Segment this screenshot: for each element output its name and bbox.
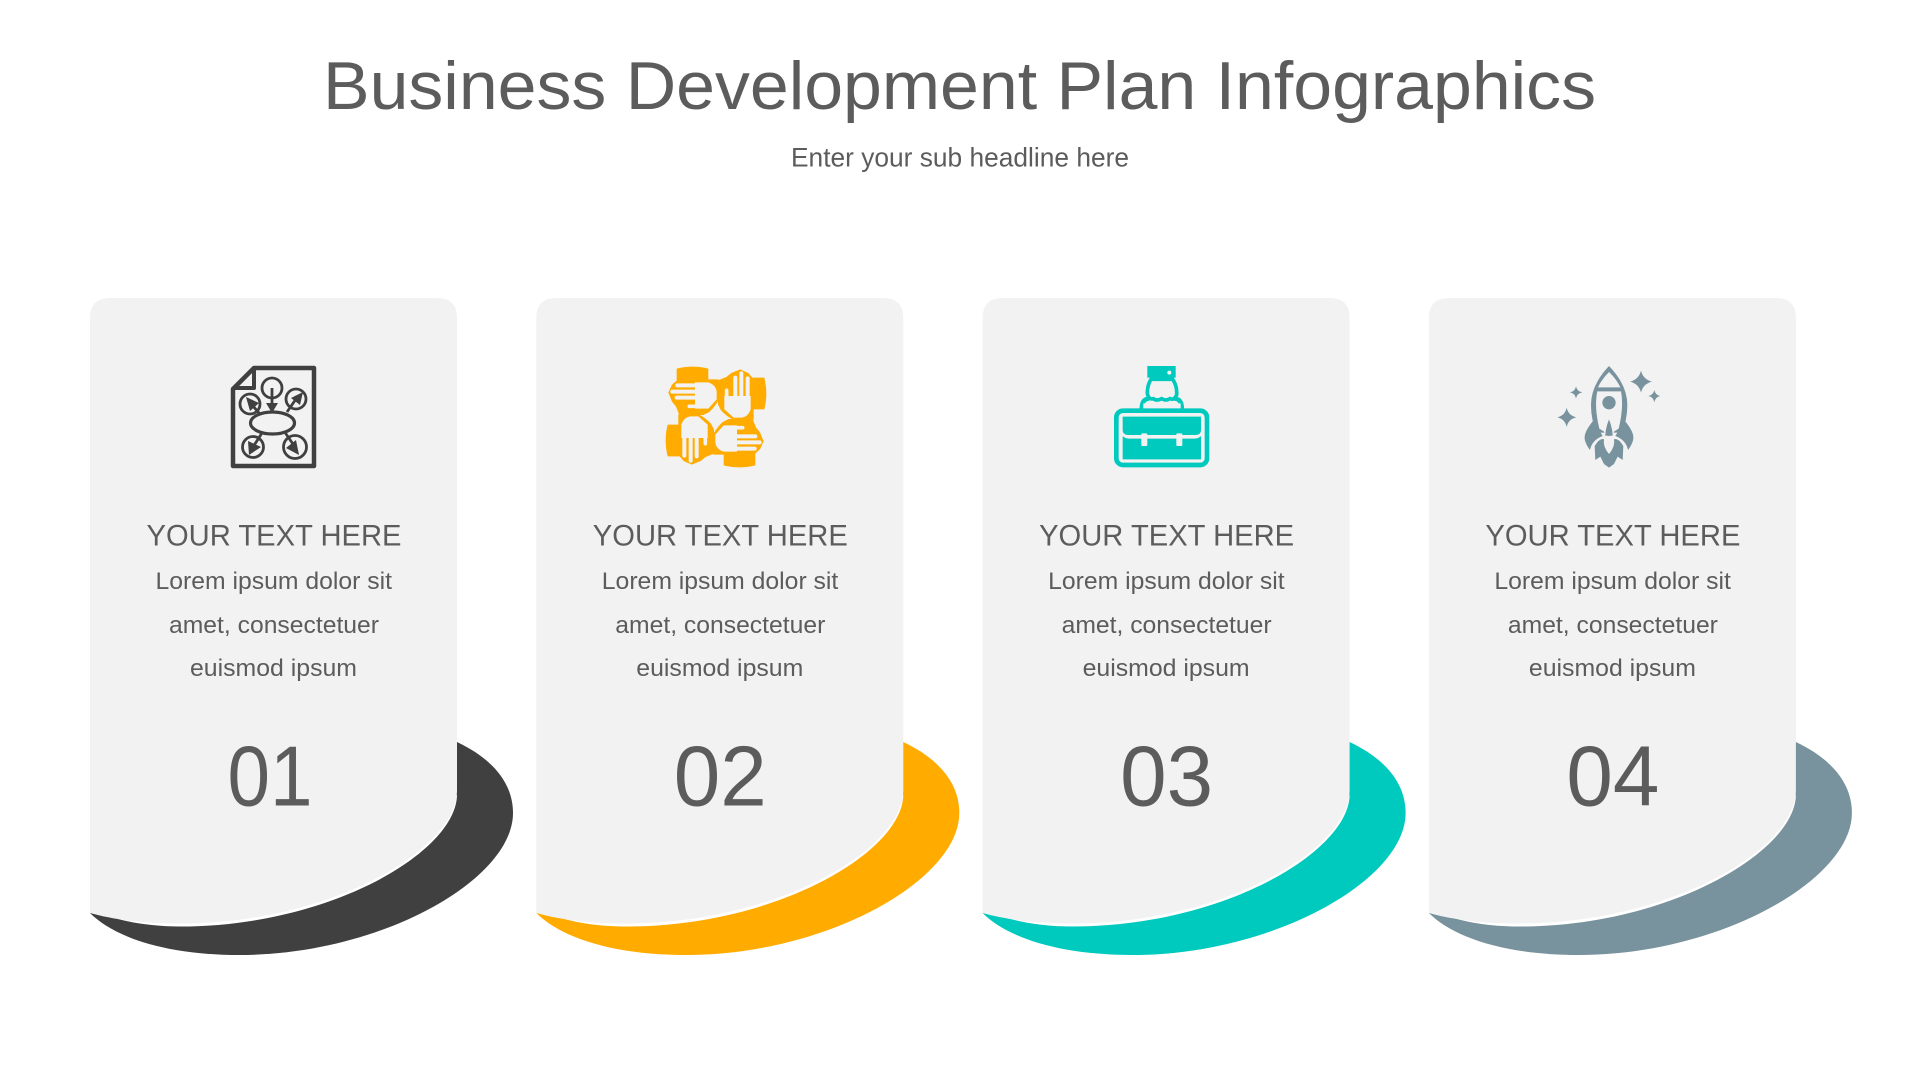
body text 02: euismod ipsum <box>636 655 803 682</box>
body text 04: Lorem ipsum dolor sit <box>1494 568 1731 595</box>
panel: card 03 <box>983 298 1406 955</box>
panel: card 04 <box>1429 298 1852 955</box>
icon: rocket with stars <box>1557 366 1660 468</box>
card edge highlight 02 <box>551 795 903 926</box>
number 03: 03 <box>1120 730 1213 824</box>
card body 02 <box>536 298 903 924</box>
icon: document with mind map <box>233 368 314 466</box>
card body 04 <box>1429 298 1796 924</box>
body text 01: euismod ipsum <box>190 655 357 682</box>
card body 01 <box>90 298 457 924</box>
body text 01: amet, consectetuer <box>169 612 379 639</box>
body text 03: amet, consectetuer <box>1062 612 1272 639</box>
body text 03: Lorem ipsum dolor sit <box>1048 568 1285 595</box>
body text 01 <box>156 568 392 682</box>
icon: hand holding briefcase <box>1116 366 1207 465</box>
icon: four hands <box>666 367 766 467</box>
number 01: 01 <box>228 730 312 824</box>
card edge highlight 03 <box>998 795 1350 926</box>
heading 01: YOUR TEXT HERE <box>146 520 402 552</box>
body text 03 <box>1048 568 1285 682</box>
body text 01: Lorem ipsum dolor sit <box>156 568 392 595</box>
body text 02: amet, consectetuer <box>615 612 825 639</box>
heading 04: YOUR TEXT HERE <box>1485 520 1740 552</box>
sub headline: Enter your sub headline here <box>791 142 1129 172</box>
body text 04 <box>1494 568 1731 682</box>
card body 03 <box>983 298 1350 924</box>
card edge highlight 01 <box>105 795 457 926</box>
number 02: 02 <box>674 730 767 824</box>
shadow ellipse 03 <box>983 742 1406 955</box>
shadow ellipse 01 <box>90 742 513 955</box>
body text 02: Lorem ipsum dolor sit <box>602 568 839 595</box>
number 04: 04 <box>1566 730 1659 824</box>
title: Business Development Plan Infographics <box>323 48 1596 124</box>
heading 03: YOUR TEXT HERE <box>1039 520 1294 552</box>
body text 03: euismod ipsum <box>1083 655 1250 682</box>
panel: card 01 <box>90 298 513 955</box>
body text 04: euismod ipsum <box>1529 655 1696 682</box>
body text 04: amet, consectetuer <box>1508 612 1718 639</box>
card edge highlight 04 <box>1444 795 1796 926</box>
shadow ellipse 04 <box>1429 742 1852 955</box>
body text 02 <box>602 568 839 682</box>
heading 02: YOUR TEXT HERE <box>593 520 848 552</box>
shadow ellipse 02 <box>536 742 959 955</box>
panel: card 02 <box>536 298 959 955</box>
